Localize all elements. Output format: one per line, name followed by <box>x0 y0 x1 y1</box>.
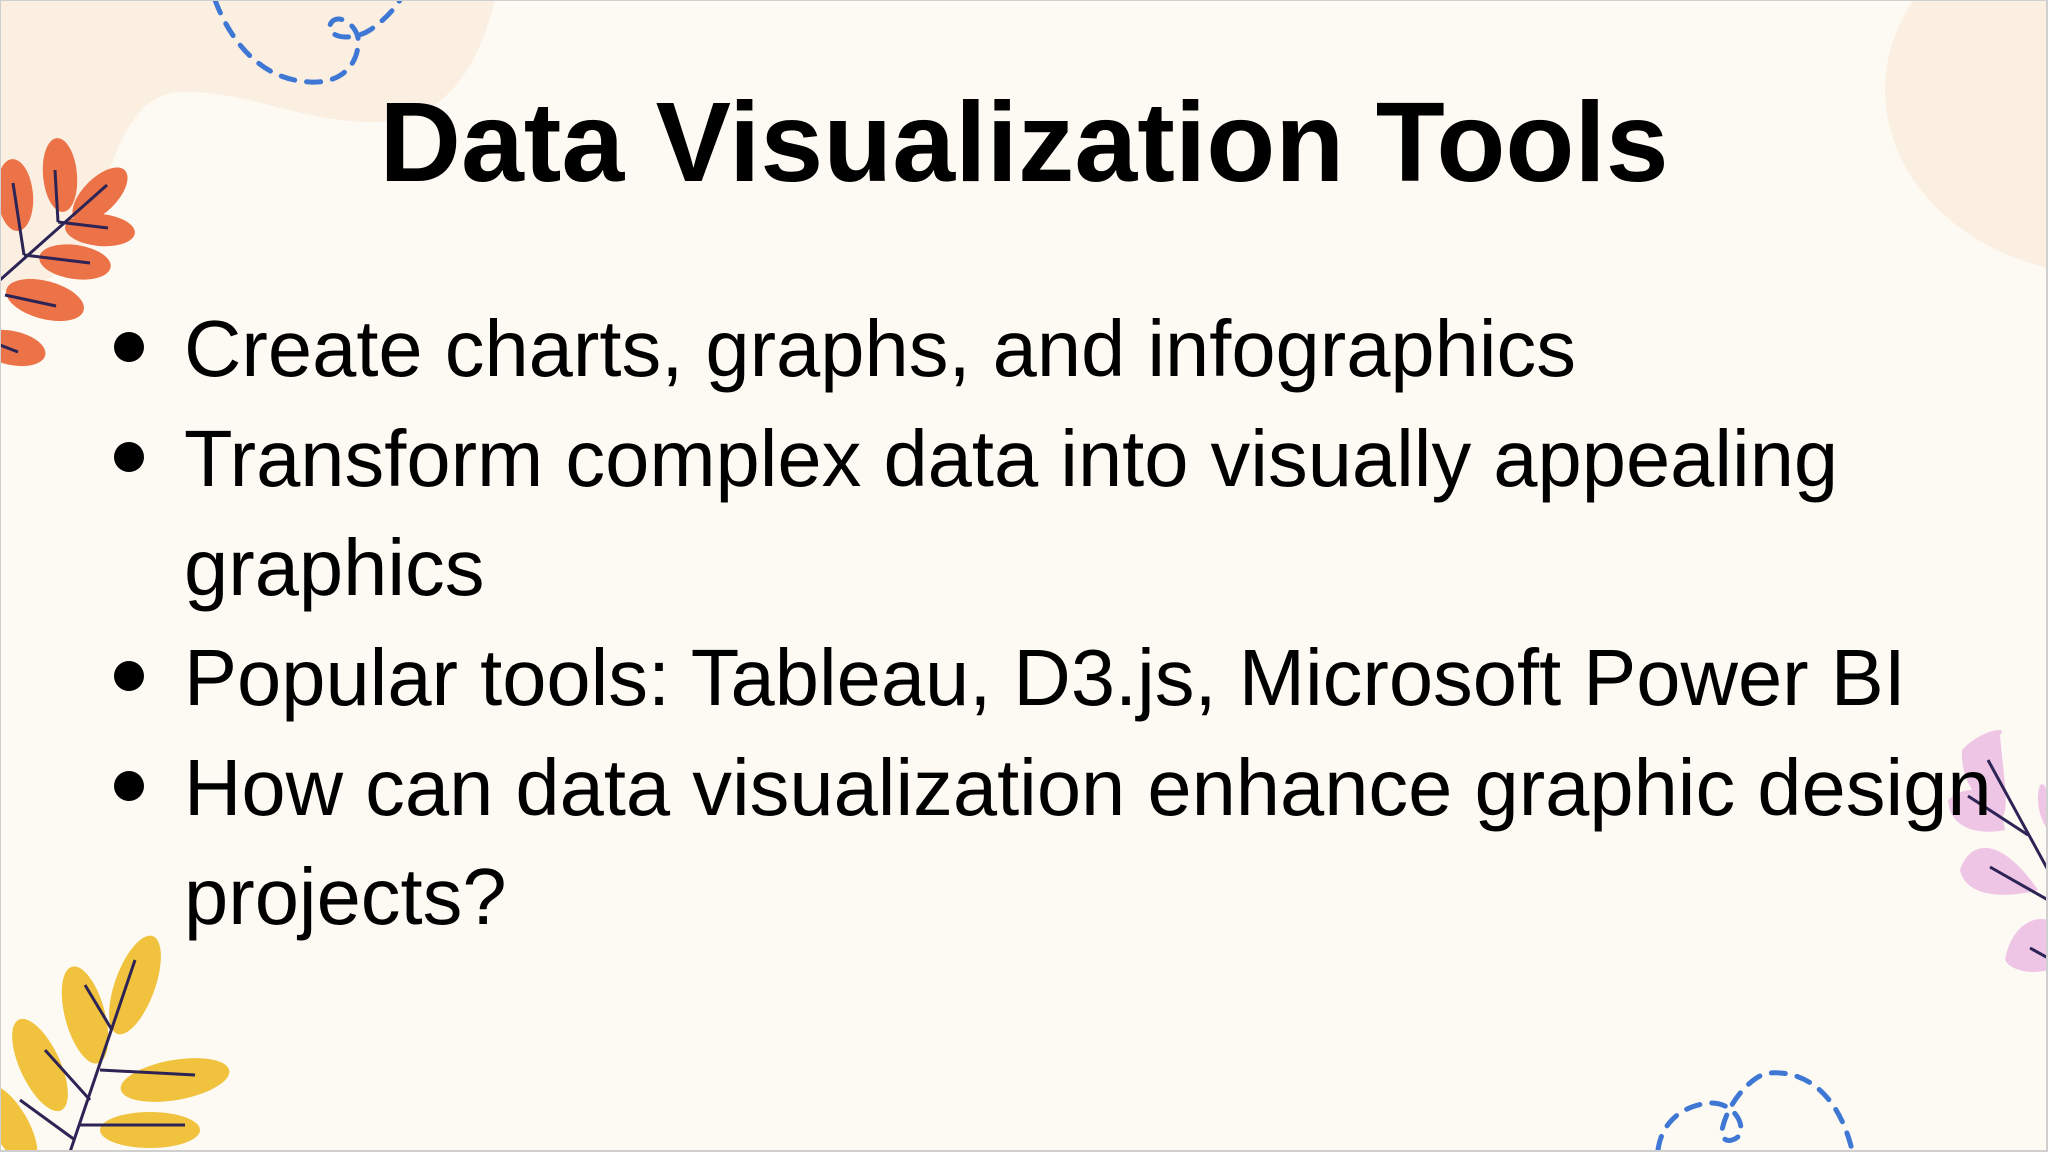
bullet 3 <box>114 633 1906 722</box>
blob: top-right <box>1885 0 2048 275</box>
blob: top-left <box>0 0 495 290</box>
icon: dashed loop top <box>215 0 400 82</box>
bullet list: Transform complex data into visually appealing <box>184 414 1838 503</box>
icon: pink leaves <box>1948 730 2048 972</box>
icon: yellow leaves <box>0 929 233 1152</box>
bullet list: Create charts, graphs, and infographics <box>184 304 1576 393</box>
bullet 4 <box>114 743 1992 941</box>
bullet list: How can data visualization enhance graphic design <box>184 743 1992 832</box>
bullet list: Popular tools: Tableau, D3.js, Microsoft Power BI <box>184 633 1906 722</box>
bullet list: graphics <box>184 523 484 612</box>
bullet 2 <box>114 414 1838 612</box>
icon: orange leaves <box>0 137 137 372</box>
bullet list: projects? <box>184 852 507 941</box>
title: Data Visualization Tools <box>379 79 1669 205</box>
icon: dashed loop bottom <box>1658 1073 1852 1150</box>
bullet 1 <box>114 304 1576 393</box>
